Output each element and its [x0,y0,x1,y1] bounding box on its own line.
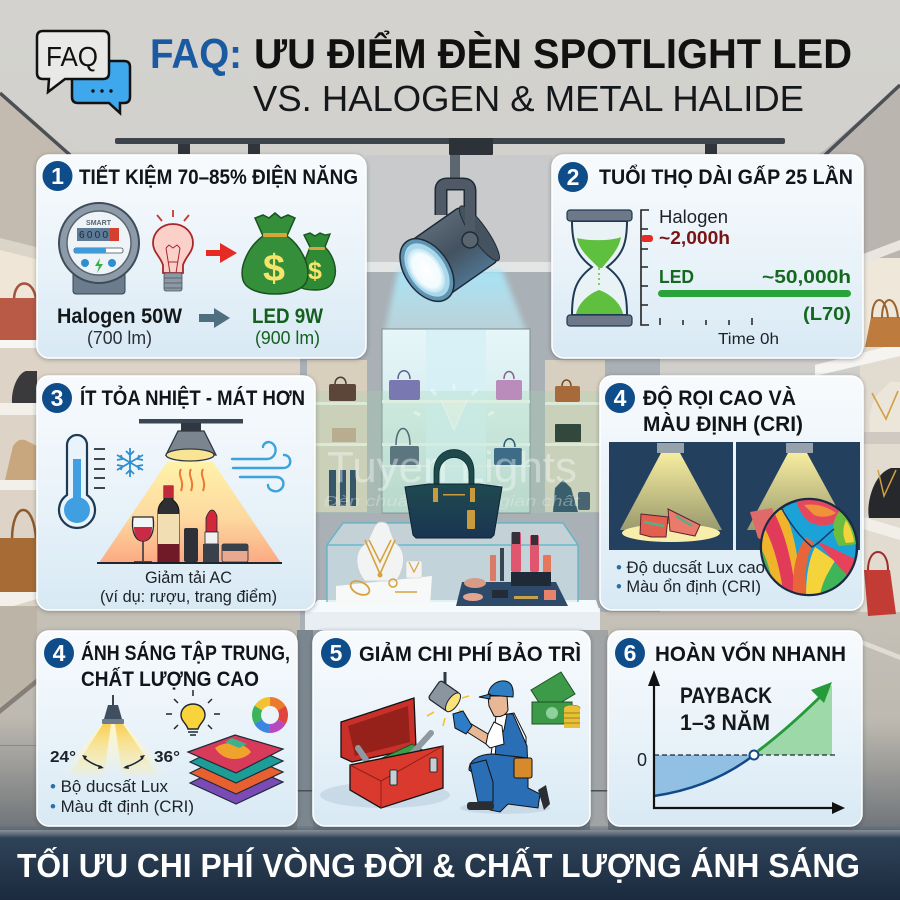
badge 3: 3 [51,385,63,411]
icon: money bags: $ [263,248,285,290]
jewellery display [336,522,432,606]
chart: payback curve: 1–3 NĂM [680,710,770,735]
text: LED 9W [252,305,323,348]
panel: 4b focused light [37,631,297,826]
icon: hourglass [567,210,632,326]
text: Halogen 50W [57,305,182,348]
arrow: red [206,243,237,263]
panel: 6 payback [608,631,862,826]
chart: lifespan timeline [641,207,851,348]
badge 4b [44,638,74,668]
hero handbag on the counter [405,450,502,538]
icon: colour wheel [256,702,284,728]
text: LED 9W: LED 9W [252,305,323,328]
title: ƯU ĐIỂM ĐÈN SPOTLIGHT LED [254,29,852,77]
chart: lifespan timeline: Halogen [659,207,728,227]
icon: FAQ speech bubbles [37,31,130,113]
text: bullet list [616,558,765,596]
panel: 5 maintenance [313,631,590,826]
title: FAQ: [150,30,242,77]
bottom banner [0,826,900,900]
display counter with glass case [305,523,600,630]
badge 4 [605,383,635,413]
heading 3: ÍT TỎA NHIỆT - MÁT HƠN [80,386,305,410]
chart: payback curve: PAYBACK [680,683,772,708]
icon: smart meter [59,203,139,294]
chart: lifespan timeline: ~50,000h [762,267,851,287]
text: Halogen 50W: (700 lm) [87,328,152,348]
central glass display wall [307,270,605,513]
text: reduced AC load: (ví dụ: rượu, trang điểm) [100,587,277,606]
wall merchandise: right jewellery and bags [864,300,900,616]
text: LED 9W: (900 lm) [255,328,320,348]
icon: technician [453,681,550,814]
chart: lifespan timeline: Time 0h [718,331,779,348]
icon: beam-angle lamp diagram [50,695,180,775]
badge 6 [615,638,645,668]
icon: banknotes and coins [531,672,580,728]
badge 1 [42,161,72,191]
image: colourful fabric magnifier [760,498,859,600]
bottom banner: TỐI ƯU CHI PHÍ VÒNG ĐỜI & CHẤT LƯỢNG ÁNH SÁNG [17,846,860,884]
icon: beam-angle lamp diagram: 24° [50,749,76,766]
heading 1: TIẾT KIỆM 70–85% ĐIỆN NĂNG [79,165,358,189]
text: reduced AC load: Giảm tải AC [145,568,232,587]
wall merchandise: left bags [0,284,38,592]
panel: 2 lifespan [552,155,863,358]
badge 6: 6 [624,640,636,666]
text: Halogen 50W: Halogen 50W [57,305,182,328]
heading 4: MÀU ĐỊNH (CRI) [643,413,803,436]
chart: payback curve [637,670,845,814]
icon: folded fabric stack [188,735,283,804]
badge 2: 2 [567,164,579,190]
icon: snowflake [117,448,143,477]
image: spotlight on fabric right [736,442,860,550]
heading 6: HOÀN VỐN NHANH [655,642,846,666]
icon: wind [232,442,290,491]
ceiling track rail [0,85,900,155]
icon: smart meter: SMART [86,220,112,227]
panel: 4 high illuminance and stable colour [600,376,863,610]
icon: halogen bulb [153,210,193,291]
badge 4b: 4 [53,640,66,666]
chart: lifespan timeline: (L70) [803,304,851,324]
text: bullet list [50,777,194,816]
icon: toolbox [320,698,450,808]
watermark logo [324,384,580,510]
badge 5: 5 [330,640,343,666]
heading 4: ĐỘ RỌI CAO VÀ [643,386,796,410]
heading 4 [643,386,803,436]
icon: thermometer [59,435,105,528]
badge 3 [42,383,72,413]
icon: idea bulb [166,690,220,735]
heading 4b [81,641,290,691]
text: bullet list: • Màu đt định (CRI) [50,797,194,816]
icon: small spotlight being serviced [427,672,469,726]
cosmetics display [456,532,568,606]
icon: smart meter: 6000 [79,230,108,241]
chart: payback curve: 0 [637,750,647,770]
icon: money bags: $ [308,257,322,285]
heading 5: GIẢM CHI PHÍ BẢO TRÌ [359,643,581,666]
title [150,29,852,119]
icon: ceiling lamp and cone of light [97,419,282,564]
icon: FAQ speech bubbles: FAQ [46,41,98,72]
small handbags on the shelves [329,371,590,512]
heading 4b: CHẤT LƯỢNG CAO [81,668,259,691]
chart: lifespan timeline: ~2,000h [659,228,730,248]
panel: 3 low heat [37,376,315,610]
title: VS. HALOGEN & METAL HALIDE [253,78,804,119]
image: spotlight on fabric left [609,442,733,550]
badge 4: 4 [614,385,627,411]
heading 4b: ÁNH SÁNG TẬP TRUNG, [81,641,290,665]
badge 2 [558,162,588,192]
text: bullet list: • Màu ổn định (CRI) [616,577,761,596]
central spotlight lamp [389,138,506,311]
text: reduced AC load [100,568,277,606]
arrow: grey [199,308,230,328]
watermark logo: Đèn chuẩn - Không gian chất [324,493,580,510]
heading 2: TUỔI THỌ DÀI GẤP 25 LẦN [599,165,853,189]
panel: 1 energy saving [37,155,366,358]
badge 5 [321,638,351,668]
watermark logo: Tuyen Lights [327,443,577,492]
text: bullet list: • Bộ ducsất Lux [50,777,168,796]
icon: wine glass, bottle, lipstick and jar [132,486,248,562]
icon: money bags [242,213,335,294]
badge 1: 1 [51,163,64,189]
text: bullet list: • Độ ducsất Lux cao [616,558,765,577]
chart: lifespan timeline: LED [659,267,694,287]
icon: beam-angle lamp diagram: 36° [154,749,180,766]
